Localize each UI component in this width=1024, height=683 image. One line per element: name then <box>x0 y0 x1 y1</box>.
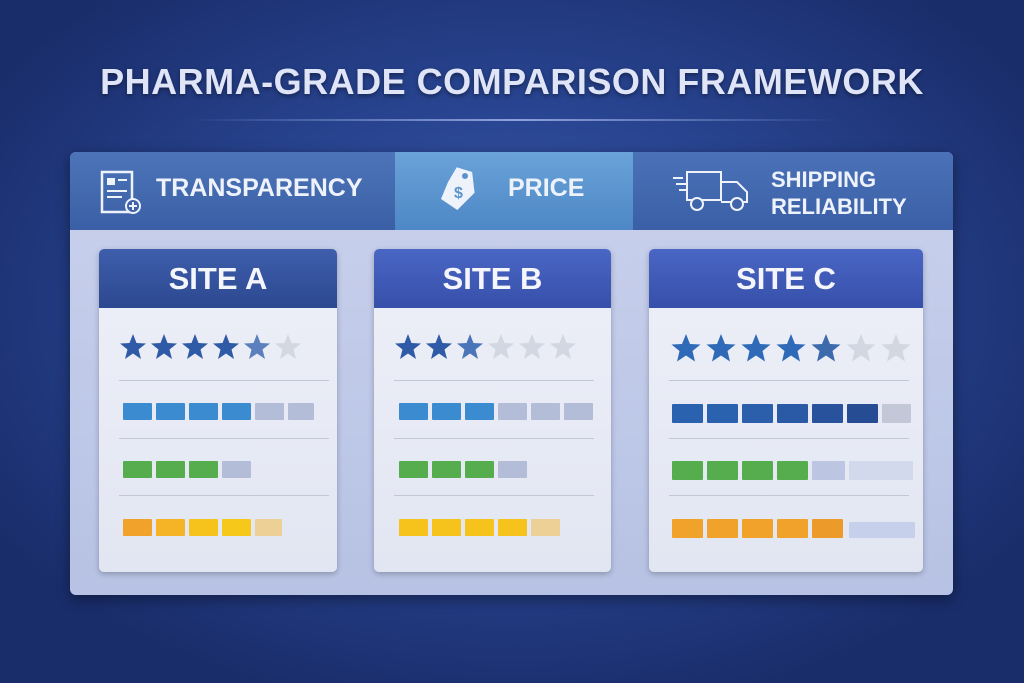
bars B <box>399 403 593 536</box>
stars B <box>395 334 576 359</box>
icon: price tag <box>441 167 475 210</box>
stars C <box>672 334 910 362</box>
header: transparency: TRANSPARENCY <box>156 174 362 202</box>
icon: price tag: $ <box>454 185 463 202</box>
card header B <box>374 249 611 308</box>
card: site C <box>649 249 923 572</box>
bars A <box>123 403 314 536</box>
header: shipping reliability: RELIABILITY <box>771 194 907 219</box>
icon: truck <box>673 171 748 211</box>
icon: document <box>100 170 141 214</box>
header: transparency <box>70 152 395 230</box>
card header A <box>99 249 337 308</box>
card header A: SITE A <box>169 261 267 296</box>
title: PHARMA-GRADE COMPARISON FRAMEWORK <box>100 61 924 102</box>
card header B: SITE B <box>443 261 542 296</box>
header: price <box>395 152 633 230</box>
header: shipping reliability: SHIPPING <box>771 167 876 192</box>
card header C: SITE C <box>736 261 836 296</box>
stars A <box>120 334 301 359</box>
header: shipping reliability <box>633 152 953 230</box>
card header C <box>649 249 923 308</box>
header: price: PRICE <box>508 174 584 202</box>
bars C <box>672 404 915 538</box>
card: site B <box>374 249 611 572</box>
card: site A <box>99 249 337 572</box>
panel: comparison table <box>70 152 953 595</box>
